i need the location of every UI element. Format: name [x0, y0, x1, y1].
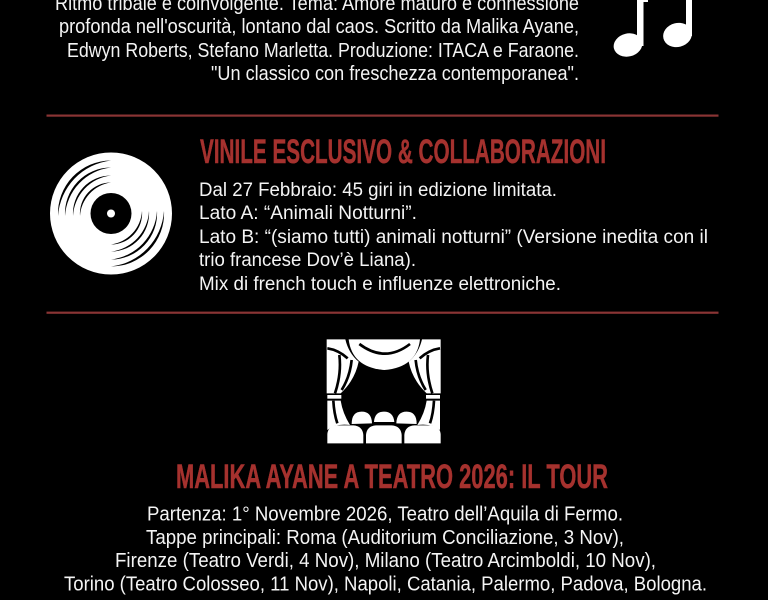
- text block: song description: "Un classico con freschezza contemporanea".: [211, 63, 579, 85]
- text block: vinile details: trio francese Dov’è Liana).: [199, 250, 416, 271]
- icon: theatre stage: [327, 339, 441, 443]
- text block: vinile details: [199, 180, 708, 295]
- text block: song description: [55, 0, 579, 85]
- text block: tour details: Firenze (Teatro Verdi, 4 Nov), Milano (Teatro Arcimboldi, 10 Nov),: [115, 550, 656, 572]
- text block: tour details: Tappe principali: Roma (Auditorium Conciliazione, 3 Nov),: [146, 527, 624, 549]
- divider: [46, 312, 718, 314]
- icon: vinyl record: [50, 152, 172, 274]
- text block: vinile details: Lato A: “Animali Notturni”.: [199, 203, 417, 224]
- text block: vinile details: Mix di french touch e influenze elettroniche.: [199, 274, 561, 295]
- text block: tour details: [64, 504, 707, 596]
- text block: song description: profonda nell'oscurità, lontano dal caos. Scritto da Malika Ayane,: [59, 16, 579, 38]
- divider: [46, 114, 718, 117]
- text block: song description: Edwyn Roberts, Stefano Marletta. Produzione: ITACA e Faraone.: [67, 40, 579, 62]
- text block: tour details: Torino (Teatro Colosseo, 11 Nov), Napoli, Catania, Palermo, Padova, Bologna.: [64, 574, 707, 596]
- text block: vinile details: Lato B: “(siamo tutti) animali notturni” (Versione inedita con il: [199, 227, 708, 248]
- text block: vinile details: Dal 27 Febbraio: 45 giri in edizione limitata.: [199, 180, 557, 201]
- text block: tour details: Partenza: 1° Novembre 2026, Teatro dell’Aquila di Fermo.: [147, 504, 623, 526]
- icon: music notes: [611, 0, 694, 60]
